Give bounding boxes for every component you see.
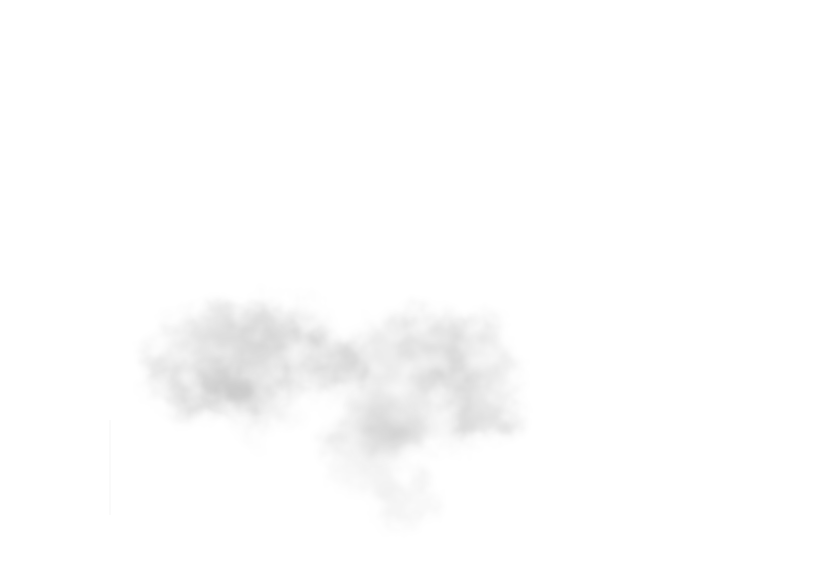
textured smoke body [146,302,516,524]
left smoke mass [146,302,372,430]
darker smoke cores [198,326,418,455]
faint vertical streak [109,420,111,515]
middle and right smoke mass [328,312,516,524]
